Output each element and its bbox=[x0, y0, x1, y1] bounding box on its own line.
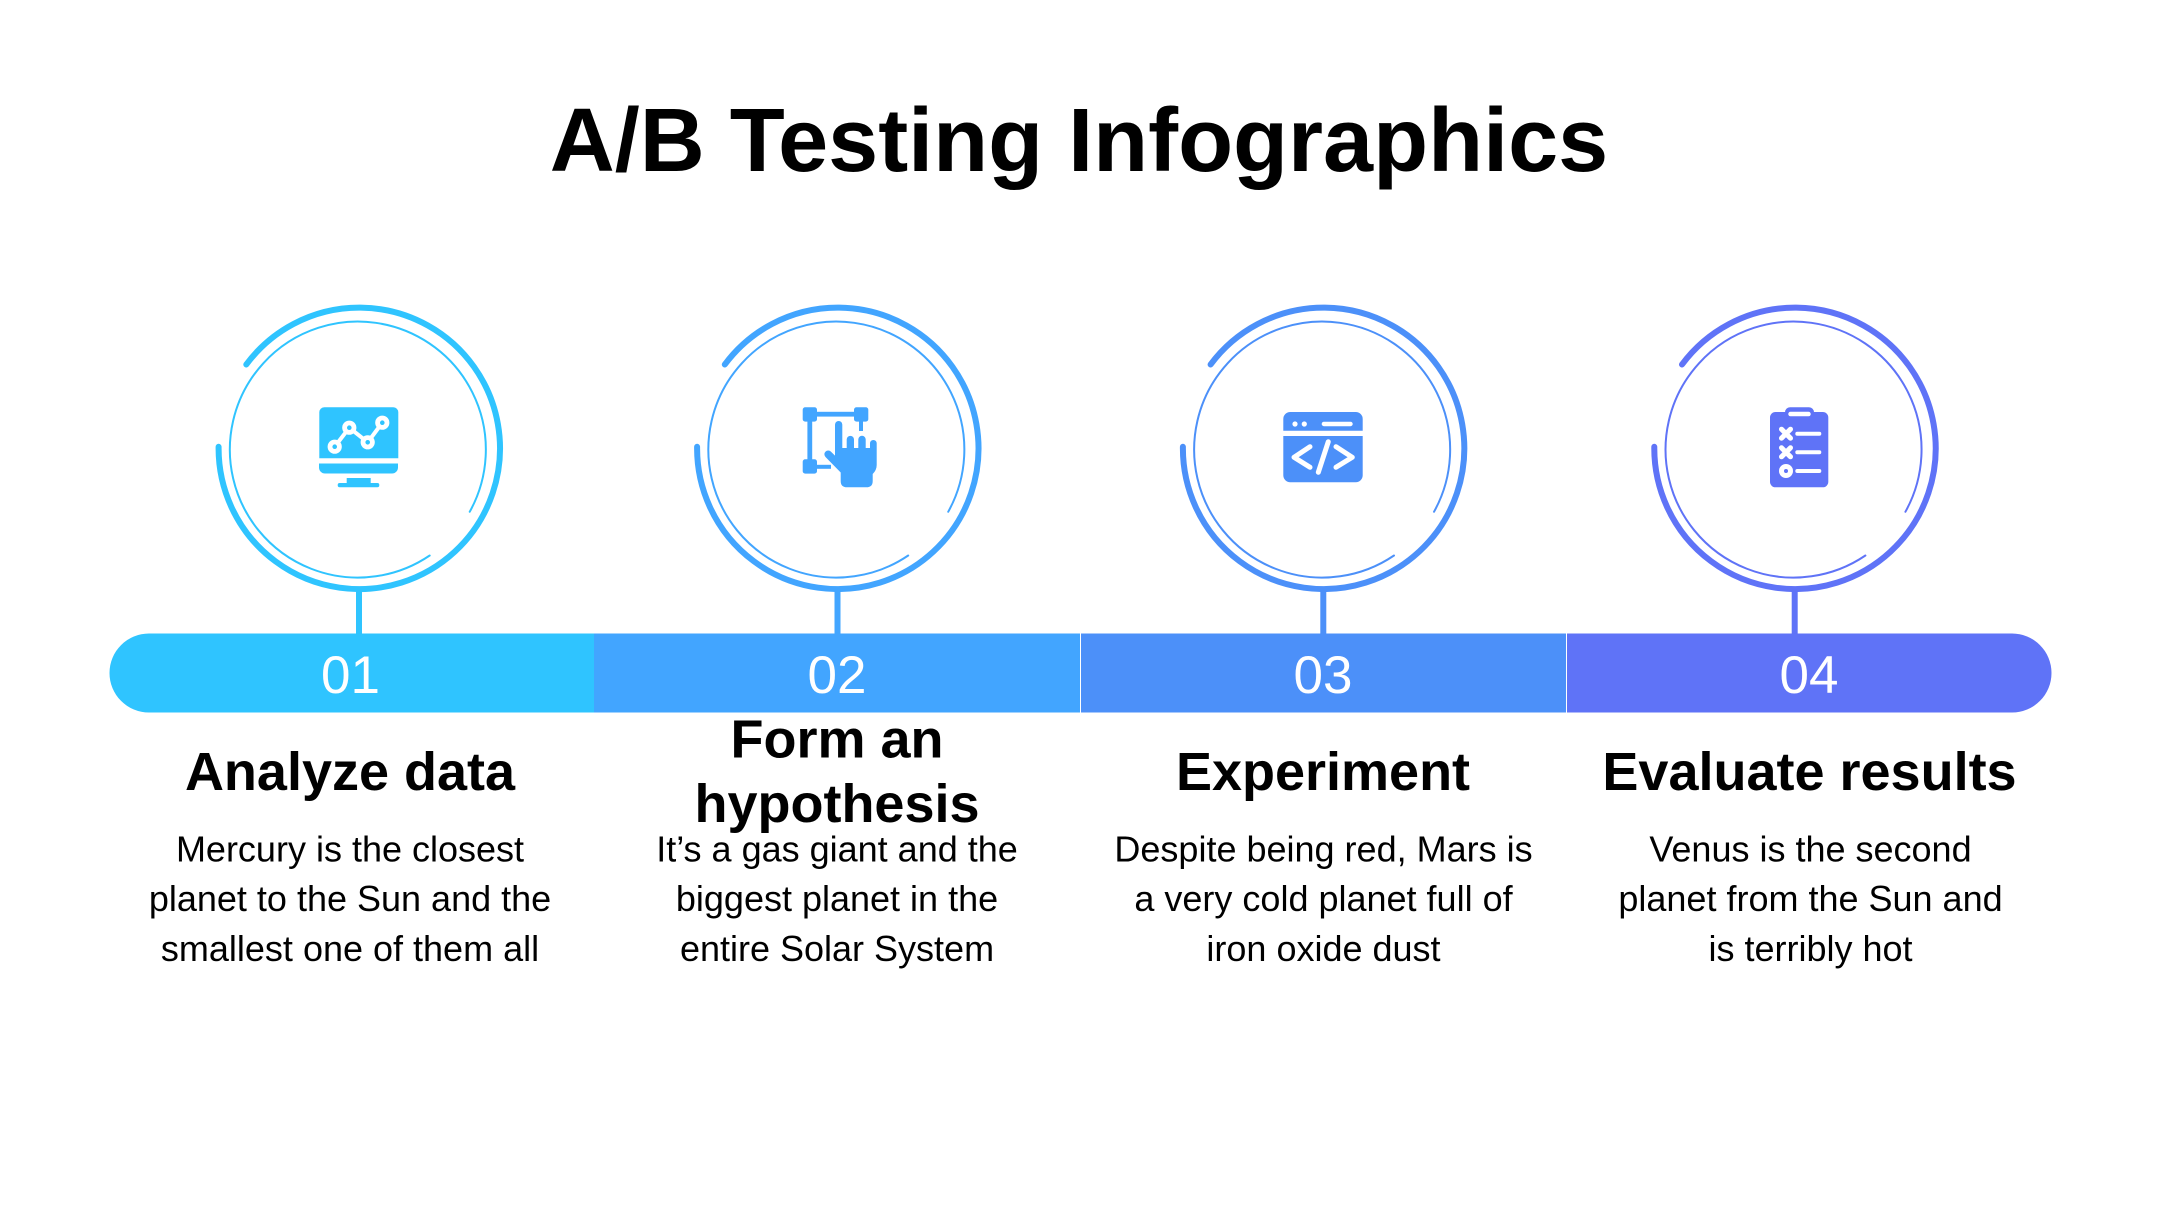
title: A/B Testing Infographics bbox=[550, 91, 1608, 191]
number 01: 01 bbox=[321, 646, 380, 705]
column 4 text bbox=[1602, 742, 2017, 969]
icon: clipboard checklist bbox=[1770, 407, 1828, 487]
icon: monitor with line chart bbox=[319, 407, 398, 487]
description 2: biggest planet in the bbox=[676, 878, 998, 919]
description 2: entire Solar System bbox=[680, 928, 994, 969]
column 3 text bbox=[1114, 742, 1533, 969]
description 4: Venus is the second bbox=[1649, 828, 1972, 870]
bar segment 04 bbox=[1567, 634, 2052, 712]
step 2 circle bbox=[697, 308, 978, 634]
heading: Evaluate results: Evaluate results bbox=[1602, 742, 2017, 802]
description 4: planet from the Sun and bbox=[1618, 878, 2003, 919]
heading: Form an hypothesis: Form an bbox=[730, 710, 944, 770]
icon: code window bbox=[1283, 412, 1363, 482]
description 1: smallest one of them all bbox=[161, 928, 539, 969]
heading: Experiment: Experiment bbox=[1176, 742, 1470, 802]
step 1 circle bbox=[219, 308, 500, 634]
number 04: 04 bbox=[1780, 646, 1838, 705]
description 1: Mercury is the closest bbox=[176, 828, 524, 870]
column 1 text bbox=[149, 742, 551, 969]
number 03: 03 bbox=[1294, 646, 1352, 705]
description 3: Despite being red, Mars is bbox=[1114, 828, 1533, 870]
description 2: It’s a gas giant and the bbox=[656, 828, 1018, 870]
bar segment 03 bbox=[1081, 634, 1566, 712]
description 3: a very cold planet full of bbox=[1134, 878, 1514, 919]
heading: Analyze data: Analyze data bbox=[185, 742, 516, 802]
bar segment 02 bbox=[594, 634, 1080, 712]
step 3 circle bbox=[1183, 308, 1464, 634]
timeline bar bbox=[110, 634, 2052, 712]
description 4: is terribly hot bbox=[1708, 928, 1913, 969]
description 1: planet to the Sun and the bbox=[149, 878, 551, 919]
column 2 text bbox=[656, 710, 1018, 969]
bar segment 01 bbox=[110, 634, 594, 712]
number 02: 02 bbox=[808, 646, 866, 705]
heading: Form an hypothesis: hypothesis bbox=[694, 774, 980, 834]
step 4 circle bbox=[1654, 308, 1936, 634]
icon: hand selecting a box bbox=[803, 407, 877, 487]
description 3: iron oxide dust bbox=[1206, 928, 1441, 969]
